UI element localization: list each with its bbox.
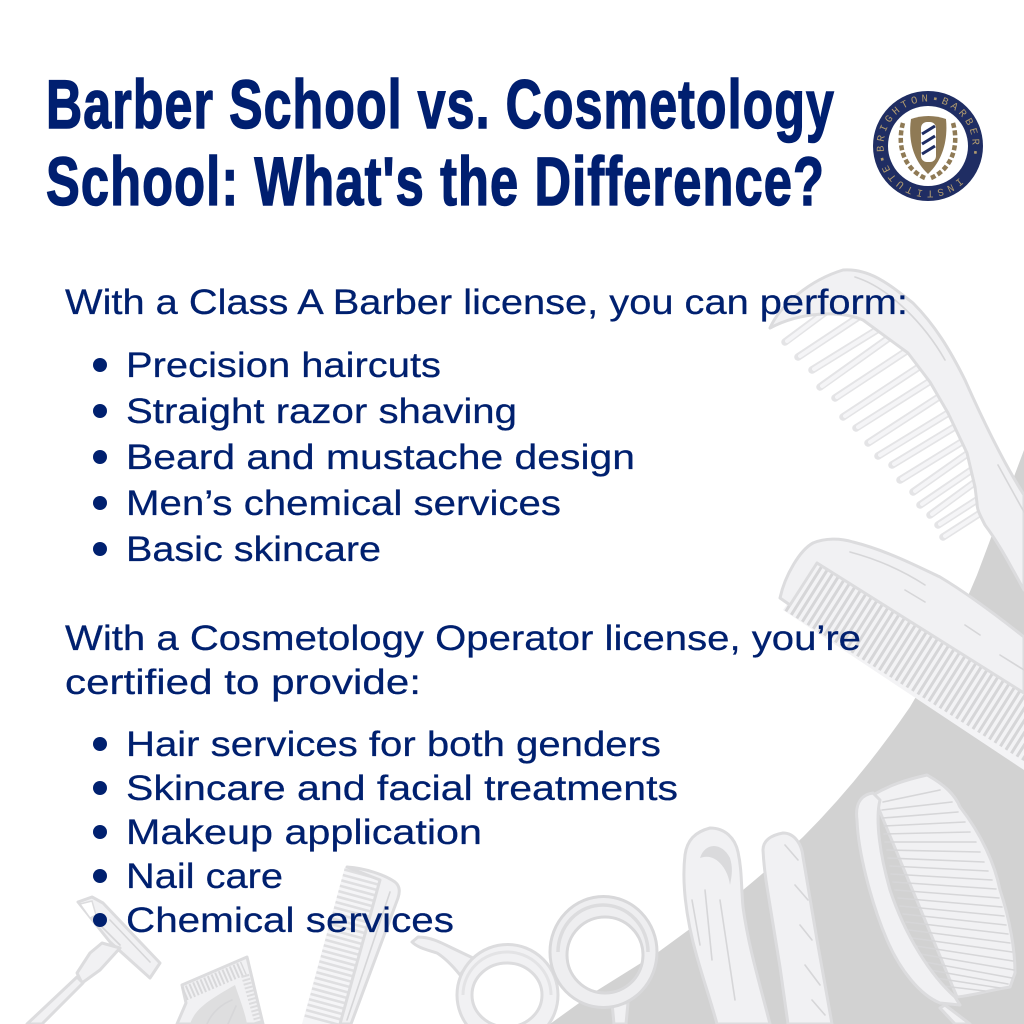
list: barber services: Straight razor shaving xyxy=(126,392,517,431)
section two text: certified to provide: xyxy=(65,663,421,702)
illustration: small comb xyxy=(302,867,399,1024)
list: barber services: Beard and mustache design xyxy=(126,438,635,477)
logo: Brighton Barber Institute badge xyxy=(873,91,983,201)
illustration: safety razor xyxy=(27,897,160,1024)
title xyxy=(46,66,835,220)
section one text xyxy=(65,283,908,569)
illustration: scissors xyxy=(412,896,657,1024)
illustration: fine-tooth comb xyxy=(780,539,1024,770)
illustration: wide-tooth comb xyxy=(770,270,1024,590)
badge barber pole xyxy=(921,122,936,162)
badge ring text: INSTITUTE▪BRIGHTON▪BARBER▪ xyxy=(876,94,980,198)
illustration: hair clipper xyxy=(177,957,263,1024)
illustration: razor blade cover xyxy=(763,833,832,1024)
section one text: With a Class A Barber license, you can perform: xyxy=(65,283,908,322)
list: cosmetology services: Skincare and facial treatments xyxy=(126,769,678,808)
background gray curved shape xyxy=(550,450,1024,1024)
illustration: hair brush xyxy=(857,775,1015,1024)
list: barber services xyxy=(93,346,635,569)
list: cosmetology services: Makeup application xyxy=(126,813,482,852)
section two text: With a Cosmetology Operator license, you’re xyxy=(65,619,861,658)
list: cosmetology services: Nail care xyxy=(126,857,283,896)
badge laurel xyxy=(901,123,955,178)
section two text xyxy=(65,619,861,940)
list: barber services: Precision haircuts xyxy=(126,346,441,385)
illustration: razor handle with spoon end xyxy=(684,828,770,1024)
list: barber services: Men’s chemical services xyxy=(126,484,561,523)
list: cosmetology services: Chemical services xyxy=(126,901,454,940)
list: cosmetology services xyxy=(93,725,678,940)
badge shield xyxy=(910,116,946,174)
list: cosmetology services: Hair services for both genders xyxy=(126,725,661,764)
list: barber services: Basic skincare xyxy=(126,530,381,569)
